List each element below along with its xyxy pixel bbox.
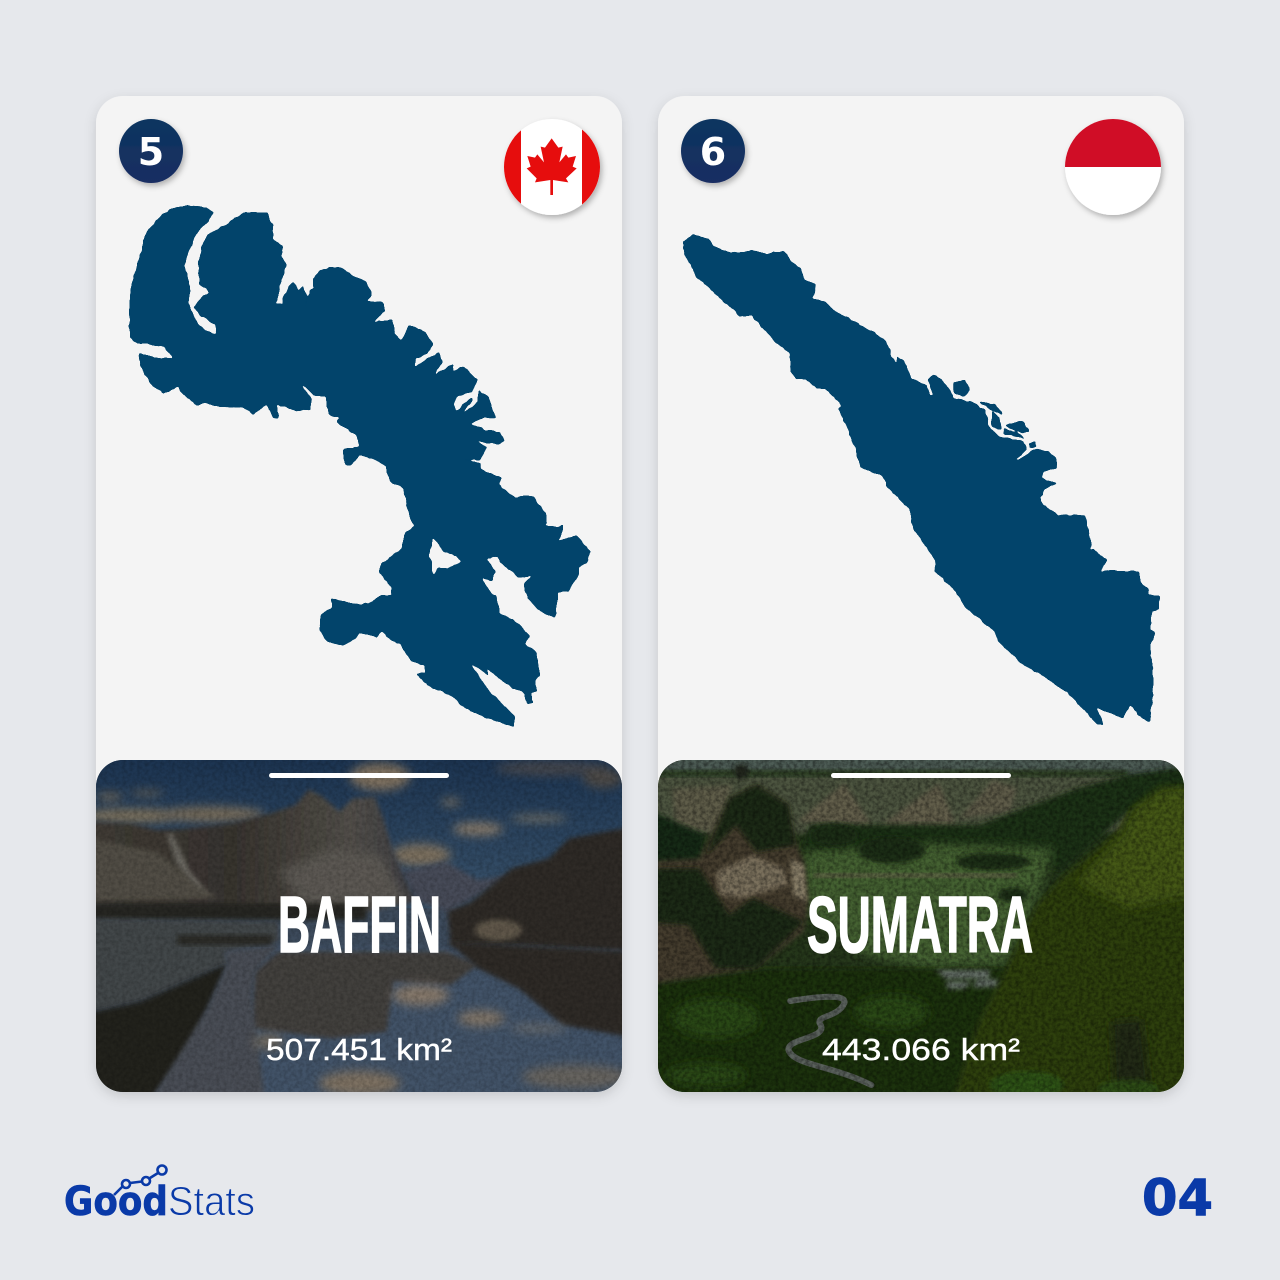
rank badge 6 <box>681 119 745 183</box>
area value Sumatra: 443.066 km² <box>822 1032 1020 1067</box>
page number: 04 <box>1142 1169 1213 1227</box>
logo: GoodStats: Good <box>64 1179 168 1225</box>
logo: GoodStats: Stats <box>168 1178 255 1224</box>
logo: GoodStats <box>64 1166 255 1225</box>
map: Baffin Island silhouette <box>129 205 590 727</box>
rank badge 6: 6 <box>700 130 726 174</box>
rank badge 5 <box>119 119 183 183</box>
decorative bar Sumatra <box>831 773 1011 778</box>
rank badge 5: 5 <box>138 130 164 174</box>
icon: Canada flag <box>500 115 604 219</box>
heading: SUMATRA: SUMATRA <box>807 880 1033 969</box>
panel: Baffin card <box>76 96 637 1102</box>
icon: Indonesia flag <box>1060 115 1166 215</box>
decorative bar Baffin <box>269 773 449 778</box>
map: Sumatra silhouette <box>683 235 1159 725</box>
panel: Sumatra photo <box>645 755 1196 1102</box>
panel: Baffin photo <box>96 760 622 1092</box>
heading: BAFFIN: BAFFIN <box>278 880 441 969</box>
panel: Sumatra card <box>645 96 1196 1102</box>
area value Baffin: 507.451 km² <box>266 1032 452 1067</box>
infographic canvas <box>66 96 1212 1216</box>
islands: Riau coast <box>953 379 1055 490</box>
